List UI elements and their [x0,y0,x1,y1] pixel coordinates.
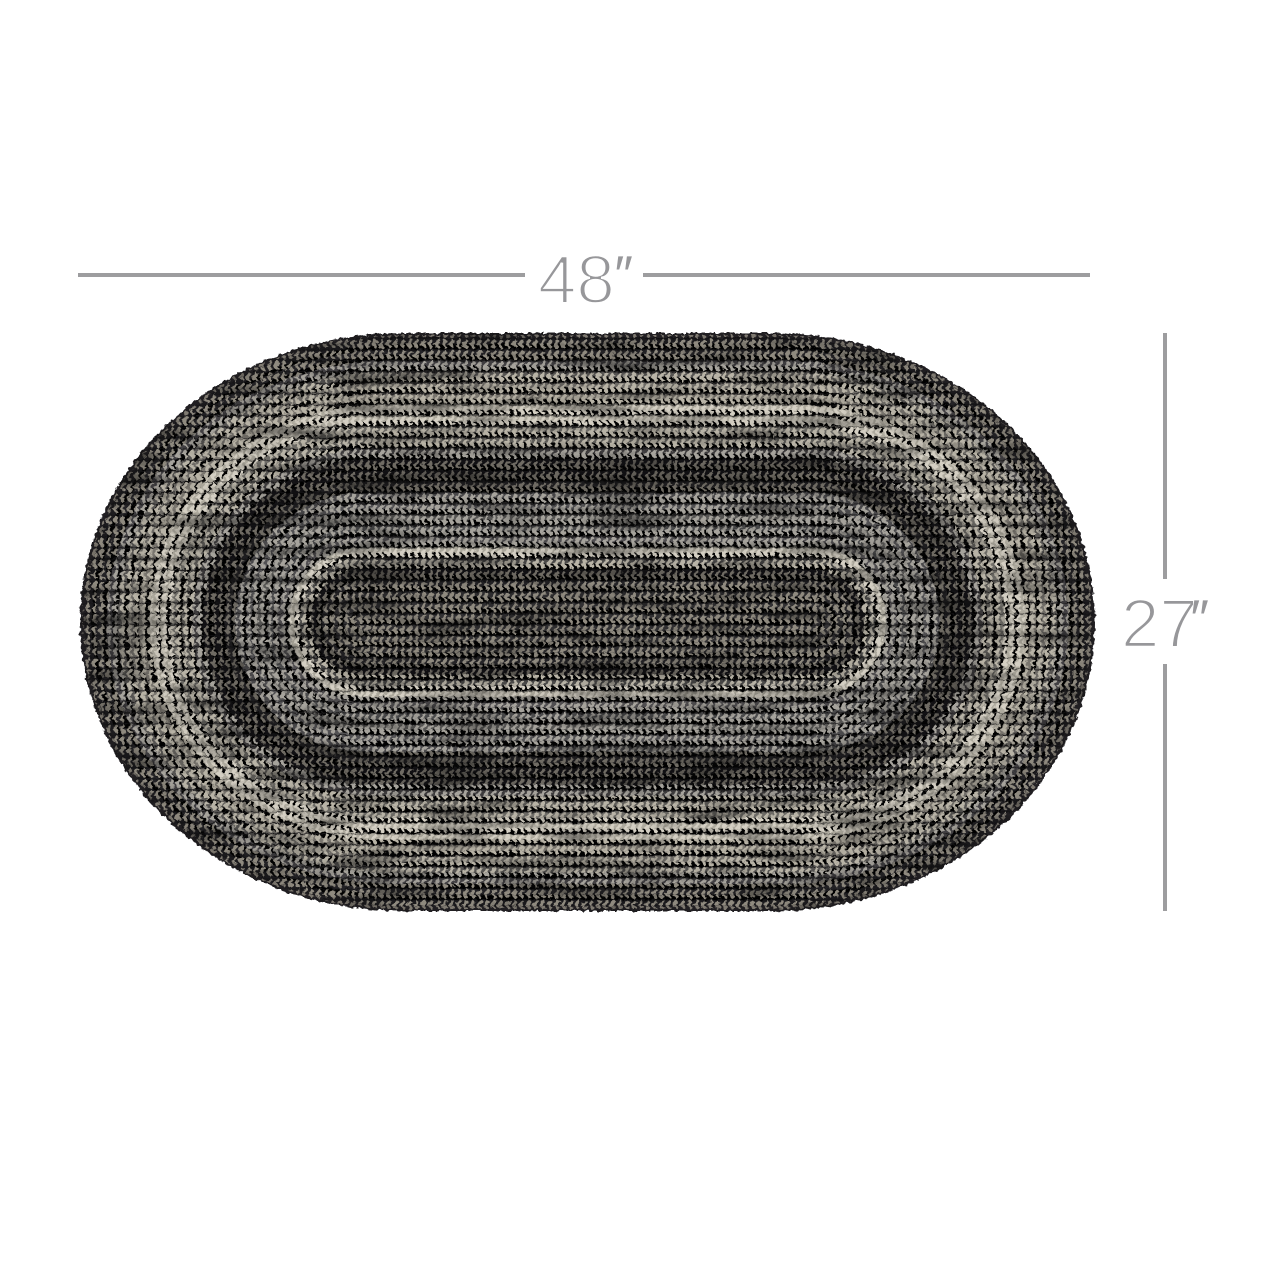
band: grey rows above black ring [176,432,998,812]
band: outer light stripe [156,410,1020,834]
center oval [306,564,870,680]
mottled dye variation [80,333,1095,911]
band: black ring [208,465,966,779]
braided oval rug [80,333,1095,911]
band: outer grey rows [112,366,1062,878]
dimension: width 48 inches [78,241,1090,318]
dimension: width 48 inches: 48 [538,241,615,318]
dimension: width 48 inches: ″ [612,246,632,304]
band: inner light stripe [294,553,880,691]
dimension: height 27 inches: ″ [1188,590,1208,648]
dimension: height 27 inches: 27 [1121,585,1198,662]
dimension: height 27 inches [1121,333,1208,911]
band: central grey rows [241,498,934,746]
band: dark outer border [92,344,1084,900]
